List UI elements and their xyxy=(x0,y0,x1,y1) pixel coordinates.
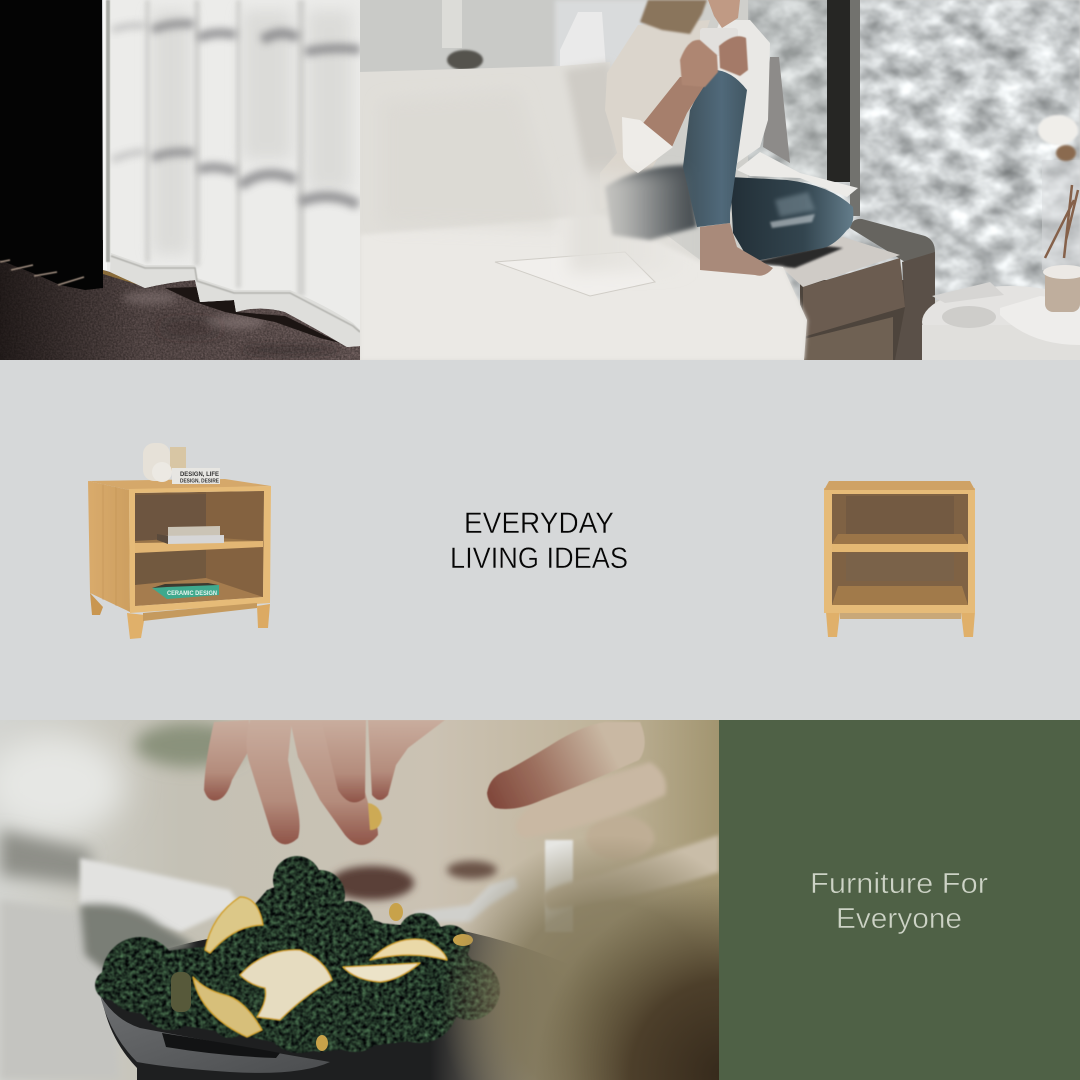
shirt back xyxy=(690,20,770,170)
cabinet interior xyxy=(135,491,264,606)
cabinet front frame xyxy=(129,486,271,613)
decor on top of cabinet: DESIGN, DESIRE xyxy=(180,478,219,484)
title: everyday living ideas xyxy=(450,507,628,575)
woman xyxy=(600,0,858,276)
grey back cushion xyxy=(763,57,790,163)
panel: photo of woman on sofa xyxy=(360,0,1080,360)
lemon slices xyxy=(193,897,447,1037)
title: everyday living ideas: EVERYDAY xyxy=(464,507,614,540)
neck xyxy=(708,0,740,28)
sofa throw xyxy=(360,62,807,360)
cabinet legs xyxy=(127,613,145,639)
panel: front view of cabinet xyxy=(824,481,975,637)
seasoning pinch xyxy=(368,803,382,830)
carpet xyxy=(0,240,360,360)
sofa base xyxy=(748,219,935,360)
tagline: furniture for everyone: Furniture For xyxy=(810,868,988,900)
tagline: furniture for everyone: Everyone xyxy=(836,903,962,935)
light slits under curtain xyxy=(0,260,84,285)
shirt front xyxy=(604,20,710,172)
pan xyxy=(100,925,570,1080)
hands xyxy=(680,40,718,87)
blurred utensil xyxy=(413,877,518,922)
window view xyxy=(748,0,1080,300)
black curtain xyxy=(0,0,103,290)
foot xyxy=(700,223,773,276)
blurred kitchen background xyxy=(0,720,719,1080)
broccoli pile xyxy=(95,856,500,1053)
sheer curtain xyxy=(103,0,360,347)
panel: photo of hands seasoning a pan xyxy=(0,720,719,1080)
shadow and brass threshold xyxy=(103,270,340,343)
cabinet top xyxy=(88,479,271,490)
forearm xyxy=(644,77,704,146)
lower book: CERAMIC DESIGN xyxy=(167,591,217,597)
front cabinet shelf xyxy=(832,544,968,552)
panel: photo of sheer curtain xyxy=(0,0,360,360)
middle band background xyxy=(0,360,1080,721)
wall xyxy=(442,0,646,70)
shin xyxy=(683,70,747,227)
decor on top of cabinet: DESIGN, LIFE xyxy=(180,471,220,478)
front cabinet legs xyxy=(826,612,975,637)
title: everyday living ideas: LIVING IDEAS xyxy=(450,542,628,575)
right hand xyxy=(487,722,719,910)
window frame xyxy=(827,0,860,216)
blurred leafy greens at left xyxy=(80,904,195,975)
cabinet shelf xyxy=(135,541,263,553)
out-of-focus fade on right of dish xyxy=(440,835,719,1080)
front cabinet interior xyxy=(832,494,968,605)
left hand fingers xyxy=(204,720,445,845)
shelf books xyxy=(152,526,224,599)
decor on top of cabinet xyxy=(143,443,220,484)
bent leg xyxy=(730,177,853,262)
panel: product photo of styled cabinet xyxy=(88,443,271,639)
mug xyxy=(700,28,717,49)
dark thigh xyxy=(605,165,697,240)
side table with vase xyxy=(922,115,1080,360)
sleeve xyxy=(622,117,673,173)
panel: green tagline block xyxy=(719,720,1080,1080)
pillow xyxy=(737,152,858,197)
tagline: furniture for everyone xyxy=(810,868,988,935)
dark lower right corner xyxy=(530,880,719,1080)
front cabinet body xyxy=(824,488,975,613)
hair xyxy=(640,0,707,34)
white wash over woman's lap xyxy=(570,172,690,272)
knife blade xyxy=(80,858,240,932)
cabinet left side xyxy=(88,481,130,612)
